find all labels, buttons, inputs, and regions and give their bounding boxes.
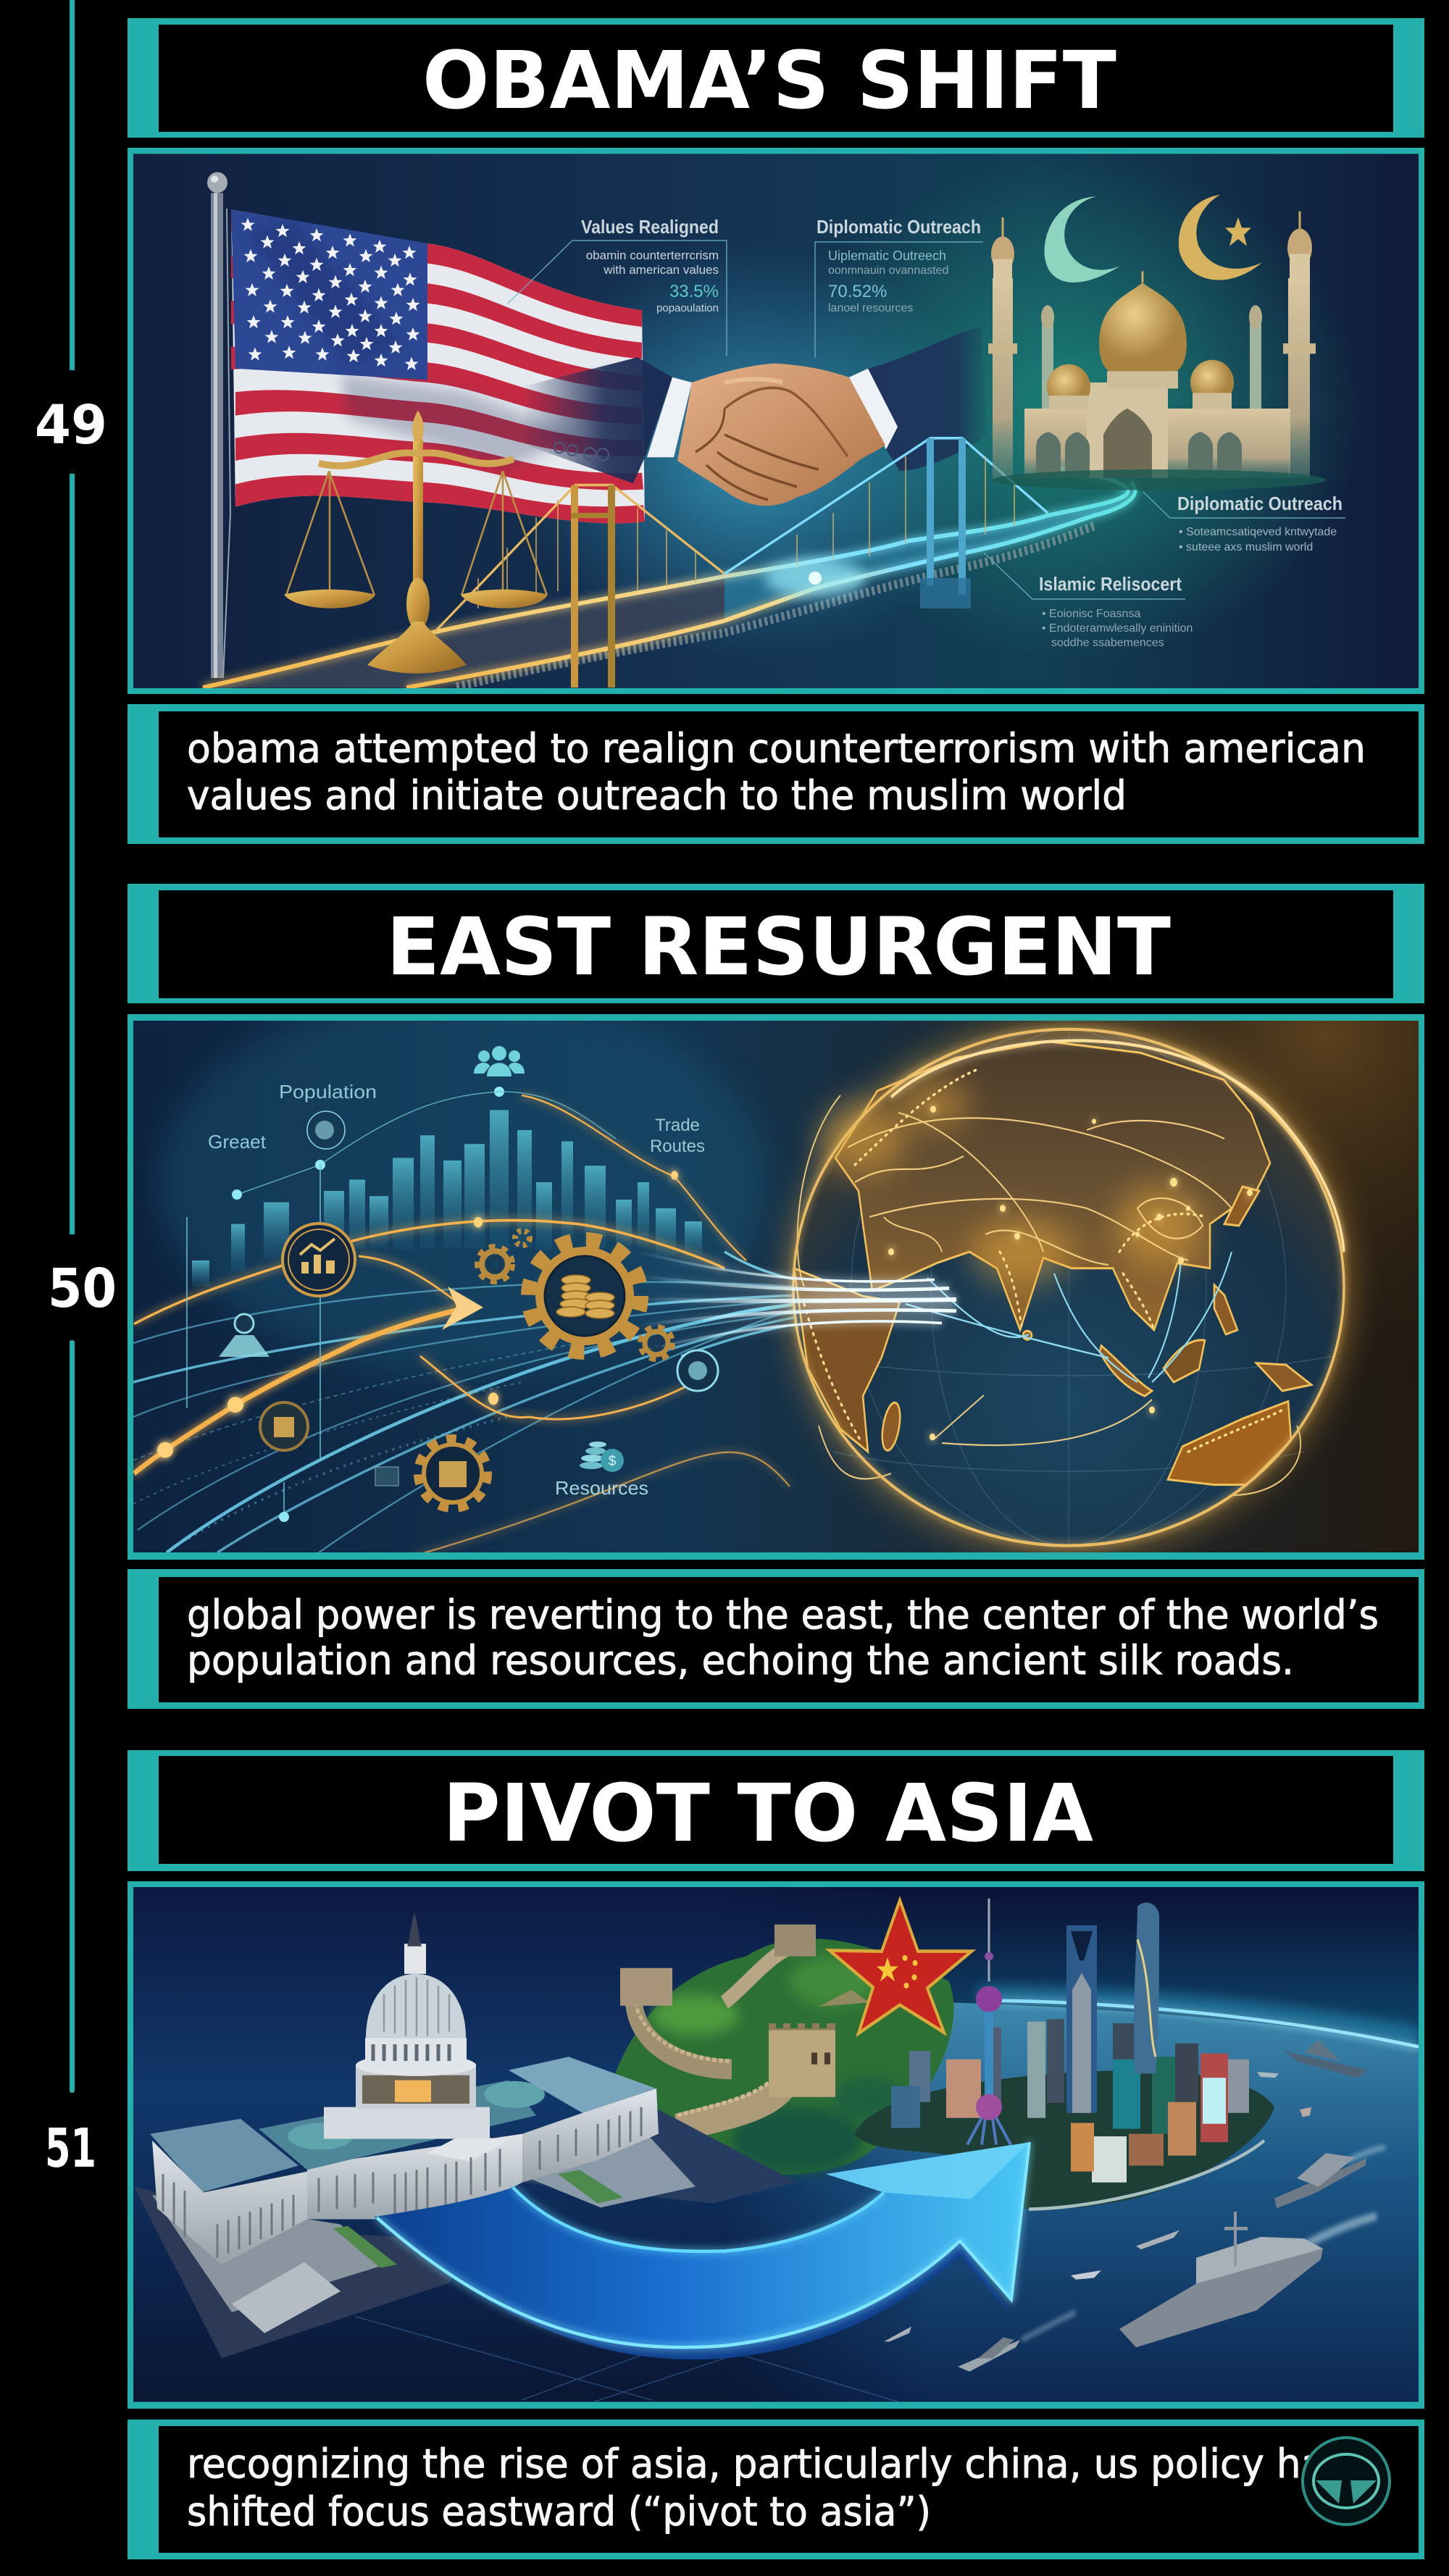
label: trade routes xyxy=(650,1116,705,1156)
icon: glowing globe xyxy=(638,1020,1353,1555)
panel: pivot to asia xyxy=(128,1750,1424,2559)
timeline number 51: 51 xyxy=(45,2117,96,2180)
heading: east resurgent: EAST RESURGENT xyxy=(386,900,1171,993)
caption: obama's shift xyxy=(128,704,1424,844)
callout: islamic relisocert: soddhe ssabemences xyxy=(1051,637,1164,649)
callout: diplomatic outreach top: lanoel resources xyxy=(828,302,913,314)
icon: resources coins: $ xyxy=(609,1454,617,1469)
icon: bridge, gold changing to blue xyxy=(203,438,1135,687)
timeline rail with section numbers xyxy=(35,0,117,2180)
icon: population people xyxy=(474,1046,525,1097)
caption: obama's shift: obama attempted to realign counterterrorism with american xyxy=(187,725,1366,771)
icon: circular logo badge xyxy=(1303,2438,1390,2525)
caption: pivot to asia xyxy=(128,2420,1424,2559)
arrow: flow arrowhead xyxy=(442,1287,483,1330)
island city xyxy=(854,1899,1274,2209)
city lights xyxy=(888,1105,1253,1440)
arrow: pivot arrow from capitol to asia xyxy=(375,2142,1030,2359)
callout: islamic relisocert xyxy=(984,553,1193,649)
panel: obama's shift xyxy=(128,18,1424,844)
icon: crescent moons and star xyxy=(1045,195,1262,283)
caption: east resurgent: population and resources, echoing the ancient silk roads. xyxy=(187,1637,1294,1684)
callout: diplomatic outreach top xyxy=(815,216,983,358)
illustration: capitol, arrow, great wall, city and navy xyxy=(128,1881,1424,2409)
icon: blue ring xyxy=(677,1350,718,1391)
caption: pivot to asia: recognizing the rise of asia, particularly china, us policy has xyxy=(187,2441,1345,2487)
callout: diplomatic outreach lower: • Soteamcsatiqeved kntwytade xyxy=(1179,526,1337,538)
heading: pivot to asia: PIVOT TO ASIA xyxy=(443,1767,1093,1860)
golden haze over lit regions xyxy=(819,1082,1203,1282)
callout: values realigned: 33.5% xyxy=(669,282,719,301)
icon: resources coins xyxy=(580,1442,624,1472)
callout: values realigned: with american values xyxy=(603,263,719,277)
gold flow ribbons xyxy=(134,1095,790,1556)
callout: diplomatic outreach lower xyxy=(1143,492,1345,553)
icon: bottom-left medallion xyxy=(260,1402,308,1450)
city skyline xyxy=(192,1110,702,1287)
icon: american flag xyxy=(231,209,645,524)
great wall hill xyxy=(601,1925,953,2175)
illustration: flag, scales, handshake, bridge and mosque xyxy=(128,148,1424,694)
icon: connected nodes xyxy=(187,1111,345,1522)
icon: handshake xyxy=(677,364,885,506)
heading: obama's shift xyxy=(128,18,1424,138)
callout: diplomatic outreach lower: Diplomatic Outreach xyxy=(1177,493,1342,514)
caption: east resurgent: global power is reverting to the east, the center of the world’s xyxy=(187,1592,1379,1638)
icon: flagpole xyxy=(207,172,230,678)
land masses xyxy=(794,1042,1311,1485)
label: trade routes: Trade xyxy=(655,1116,700,1135)
callout: diplomatic outreach top: Diplomatic Outreach xyxy=(817,216,981,238)
data streaks xyxy=(133,1252,927,1552)
icon: scales of justice xyxy=(284,410,548,674)
icon: right sleeve and cuff xyxy=(849,327,987,471)
globe rim xyxy=(793,1029,1344,1546)
globe grid xyxy=(804,1029,1333,1546)
heading: pivot to asia xyxy=(128,1750,1424,1871)
label: resources: Resources xyxy=(555,1477,648,1499)
caption: east resurgent xyxy=(128,1569,1424,1709)
icon: chinese star emblem xyxy=(830,1900,972,2033)
icon: capitol building xyxy=(134,1912,797,2358)
callout: values realigned: popaoulation xyxy=(656,302,719,314)
glowing trade lines on the map xyxy=(798,1095,1300,1495)
illustration: trade flows into glowing globe xyxy=(128,817,1449,1560)
sky and sea at right xyxy=(652,1887,1419,2402)
icon: growth chart ring xyxy=(283,1224,355,1296)
callout: values realigned: obamin counterterrcrism xyxy=(586,248,719,262)
caption: obama's shift: values and initiate outreach to the muslim world xyxy=(187,772,1127,819)
heading: east resurgent xyxy=(128,884,1424,1003)
icon: main gear with coins xyxy=(530,1241,640,1351)
panel: east resurgent xyxy=(128,817,1449,1709)
floor grid xyxy=(355,2283,898,2402)
icon: mosque xyxy=(988,212,1326,490)
label: population: Population xyxy=(279,1081,377,1103)
timeline number 49: 49 xyxy=(35,394,107,456)
callout: islamic relisocert: • Eoionisc Foasnsa xyxy=(1042,608,1140,620)
label: greaet: Greaet xyxy=(208,1131,267,1153)
bright bundle entering the globe xyxy=(638,1252,956,1352)
icon: lower gear with box xyxy=(375,1440,486,1507)
label: trade routes: Routes xyxy=(650,1137,705,1156)
icon: navy ships xyxy=(884,2040,1385,2372)
callout: values realigned: Values Realigned xyxy=(581,216,719,238)
caption: pivot to asia: shifted focus eastward (“pivot to asia”) xyxy=(187,2488,931,2535)
callout: islamic relisocert: Islamic Relisocert xyxy=(1039,573,1182,595)
callout: diplomatic outreach top: oonmnauin ovannasted xyxy=(828,264,948,277)
icon: small gears xyxy=(479,1231,671,1358)
callout: diplomatic outreach top: Uiplematic Outreech xyxy=(828,248,946,263)
glowing nodes xyxy=(157,1171,678,1458)
callout: values realigned xyxy=(507,216,727,356)
callout: diplomatic outreach lower: • suteee axs muslim world xyxy=(1179,541,1313,553)
icon: meditating figure xyxy=(219,1314,270,1357)
dotted coastal lights xyxy=(804,1069,1286,1452)
callout: islamic relisocert: • Endoteramwlesally eninition xyxy=(1042,622,1193,635)
callout: diplomatic outreach top: 70.52% xyxy=(828,282,887,301)
icon: left sleeve and cuff xyxy=(522,357,692,483)
timeline number 50: 50 xyxy=(48,1258,117,1320)
heading: obama's shift: OBAMA’S SHIFT xyxy=(422,34,1116,127)
